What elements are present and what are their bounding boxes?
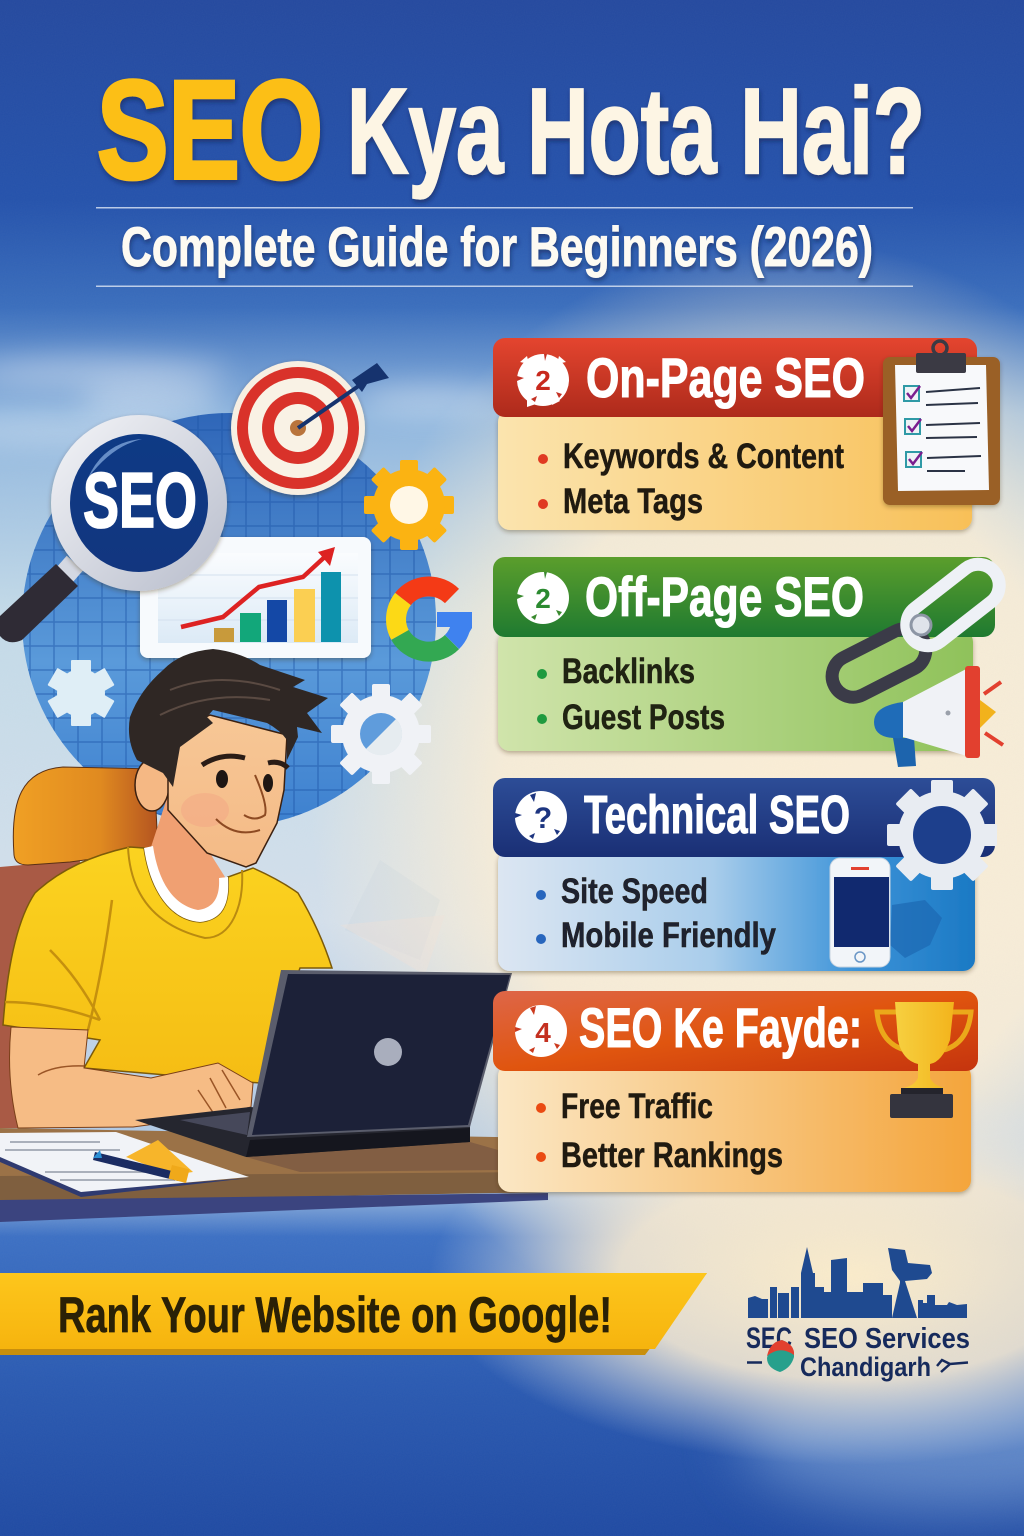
neck (150, 795, 230, 925)
laptop (135, 970, 512, 1157)
bullet list: Better Rankings (561, 1136, 783, 1175)
person (3, 649, 332, 1128)
heading: Off-Page SEO (585, 565, 864, 628)
bullet list (538, 437, 844, 521)
desk (0, 1128, 548, 1222)
heading: Technical SEO (584, 785, 850, 845)
number badge: 4 (535, 1017, 551, 1048)
icon: yellow gear (364, 460, 454, 550)
card header (493, 557, 995, 637)
heading: SEO Ke Fayde: (579, 996, 862, 1059)
icon: megaphone (874, 666, 1003, 767)
number badge (517, 572, 569, 624)
heading: On-Page SEO (586, 346, 865, 409)
eyes and brows (202, 756, 288, 792)
bullet list (536, 872, 776, 955)
logo text: SEC (746, 1322, 792, 1355)
bullet list: Backlinks (562, 652, 695, 691)
company logo: SEO Services (804, 1323, 970, 1355)
card header (493, 338, 977, 417)
hair (129, 649, 328, 787)
bullet list: Site Speed (561, 872, 708, 911)
icon: phone (830, 858, 890, 967)
number badge (515, 791, 567, 843)
card header (493, 991, 978, 1071)
number badge (517, 354, 569, 407)
icon: magnifying glass seo: SEO (83, 456, 197, 544)
card body (498, 410, 972, 530)
ear (135, 759, 169, 811)
icon: google g (396, 587, 472, 652)
seo illustration circle (22, 413, 436, 822)
number badge: ? (534, 802, 552, 835)
logo mark (767, 1340, 794, 1372)
icon: white gear right (331, 684, 431, 784)
skyline (748, 1247, 967, 1318)
panel: technical seo (493, 778, 997, 971)
nose and smile (216, 775, 266, 832)
number badge: 2 (535, 365, 551, 396)
bullet list: Keywords & Content (563, 437, 844, 476)
icon: faint map (890, 900, 942, 958)
chart card (140, 537, 371, 658)
banner (0, 1273, 707, 1355)
shirt collar (144, 846, 228, 922)
panel: off-page seo (493, 556, 1008, 767)
bullet list: Meta Tags (563, 482, 703, 521)
laptop logo (374, 1038, 402, 1066)
company logo: Chandigarh (800, 1352, 931, 1382)
icon: clipboard (883, 341, 1000, 505)
arm (10, 1027, 253, 1128)
face (168, 715, 287, 867)
panel: seo ke fayde (493, 991, 978, 1192)
card body (498, 850, 975, 971)
company logo (746, 1247, 970, 1382)
chair (0, 767, 158, 1128)
bullet list: Mobile Friendly (561, 916, 776, 955)
card body (498, 630, 973, 751)
icon: white gear left (47, 660, 115, 726)
panel: on-page seo (493, 338, 1000, 530)
number badge (515, 1005, 567, 1057)
chart trend arrow (181, 547, 335, 627)
card header (493, 778, 995, 857)
icon: trophy (877, 1002, 971, 1118)
bullet list: Guest Posts (562, 698, 725, 737)
icon: target with arrow (231, 361, 389, 495)
icon: blue gear (887, 780, 997, 890)
title: SEO (97, 51, 323, 208)
bullet list (536, 1087, 783, 1175)
shirt (3, 847, 332, 1083)
bullet list (537, 652, 725, 737)
icon: chain link (825, 556, 1008, 704)
bullet list: Free Traffic (561, 1087, 713, 1126)
paper and pen (0, 1132, 249, 1197)
title (97, 51, 925, 208)
banner text: Rank Your Website on Google! (58, 1287, 612, 1343)
number badge: 2 (535, 583, 551, 614)
icon: magnifying glass seo (0, 415, 227, 642)
card body (498, 1064, 971, 1192)
